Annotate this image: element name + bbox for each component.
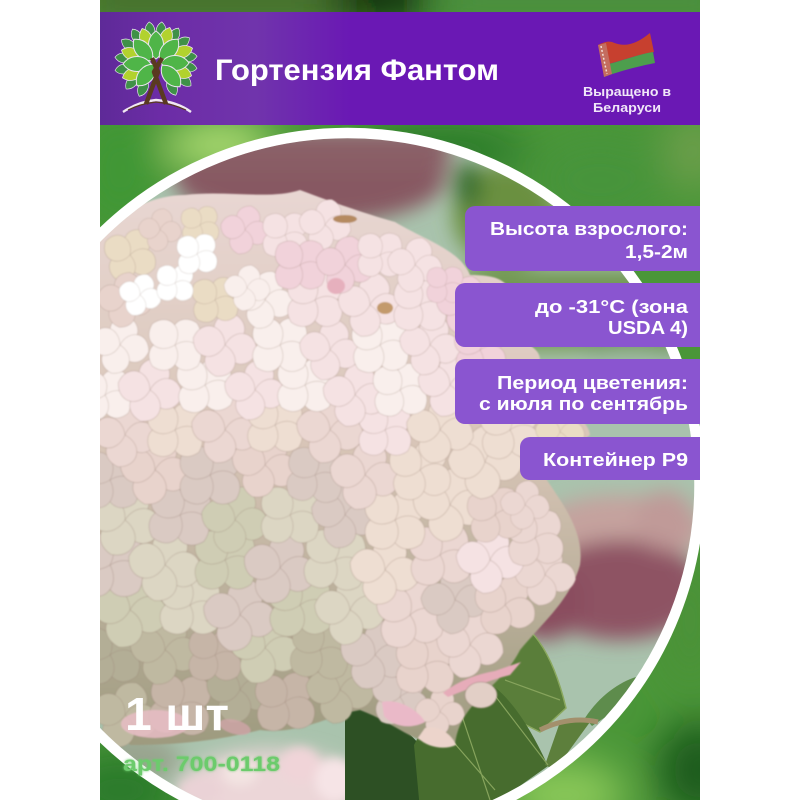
blurred background flowers and foliage — [90, 130, 705, 800]
panel: frost hardiness: USDA 4) — [608, 318, 688, 338]
white circle ring — [100, 128, 700, 800]
infographic canvas — [100, 0, 700, 800]
panel: container size: Контейнер Р9 — [543, 450, 688, 470]
panel: blurred green background — [100, 0, 700, 800]
photo: hydrangea in circle — [100, 138, 694, 800]
panel: flowering period: Период цветения: — [497, 373, 688, 393]
icon: tree logo — [114, 22, 198, 112]
panel: flowering period — [455, 359, 700, 424]
panel: flowering period: с июля по сентябрь — [479, 394, 688, 414]
leaves — [345, 634, 636, 800]
icon: Belarus flag — [598, 33, 655, 77]
title: Гортензия Фантом — [215, 54, 499, 87]
panel: adult height: 1,5-2м — [625, 242, 688, 262]
panel: adult height: Высота взрослого: — [490, 219, 688, 239]
panel: container size — [520, 437, 700, 480]
flower head — [54, 190, 590, 759]
panel: frost hardiness: до -31°С (зона — [535, 297, 689, 317]
grown in Belarus label: Беларуси — [593, 100, 661, 115]
grown in Belarus label — [584, 87, 670, 114]
quantity label: 1 шт — [125, 688, 229, 740]
grown in Belarus label: Выращено в — [583, 84, 671, 99]
panel: adult height — [465, 206, 700, 271]
panel: frost hardiness — [455, 283, 700, 347]
panel: purple header band — [100, 12, 700, 125]
article number: арт. 700-0118 — [123, 753, 280, 776]
